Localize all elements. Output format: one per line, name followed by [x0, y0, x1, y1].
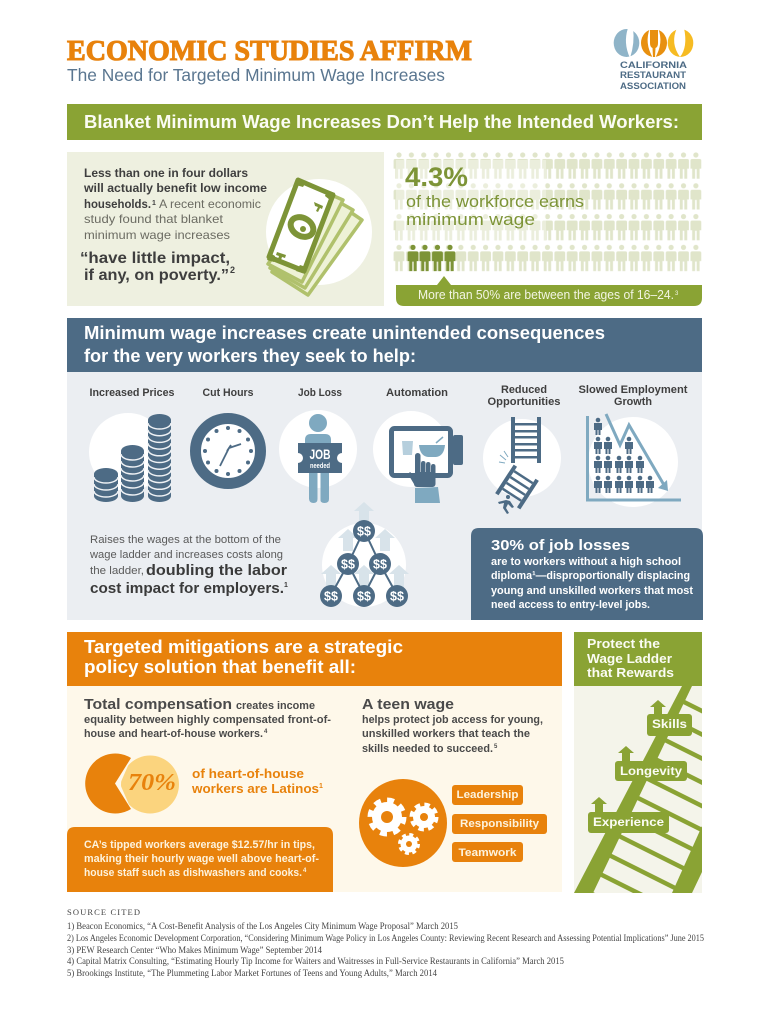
text block: total compensation: house and heart-of-house workers. [84, 728, 263, 740]
panel heading: that Rewards [587, 666, 674, 680]
label: skills: Skills [652, 717, 687, 731]
text block: less than one in four [83, 166, 267, 242]
icon: falling ladder [483, 417, 561, 514]
stat description: of the workforce earns [406, 192, 584, 211]
label: longevity [615, 746, 687, 781]
logo: California Restaurant Association: ASSOCIATION [620, 81, 686, 92]
text block: less than one in four: 1 [152, 200, 156, 207]
stat description: minimum wage [406, 210, 535, 229]
callout: 30% of job losses: young and unskilled workers that most [491, 585, 693, 597]
label: leadership [452, 785, 523, 805]
label: teamwork: Teamwork [458, 847, 517, 859]
stat: 4.3%: 4.3% [405, 162, 468, 192]
quote: if any, on poverty.” [84, 267, 229, 284]
sources: 1) Beacon Economics, “A Cost-Benefit Analysis of the Los Angeles City Minimum Wage Proposal” March 2015 [67, 921, 458, 931]
consequence labels: Slowed Employment [578, 384, 688, 396]
icon: slowed employment chart [588, 414, 681, 507]
text block: teen wage: A teen wage [362, 696, 454, 713]
consequence labels [90, 384, 688, 408]
panel heading [574, 632, 702, 686]
text block: doubling the labor cost: Raises the wages at the bottom of the [90, 534, 281, 546]
label: leadership: Leadership [456, 789, 519, 801]
text block: total compensation [84, 696, 331, 740]
text block: teen wage: skills needed to succeed. [362, 743, 493, 755]
consequence labels: Growth [614, 396, 652, 408]
consequence labels: Job Loss [298, 387, 342, 399]
callout: tipped workers: 4 [303, 868, 307, 874]
quote: “have little impact, [80, 250, 230, 267]
heading bar: targeted mitigations: policy solution that benefit all: [84, 657, 356, 677]
label: experience [588, 797, 669, 833]
icon: job needed person: JOB [310, 446, 330, 462]
logo: California Restaurant Association: RESTAURANT [620, 70, 686, 81]
heading bar: unintended consequences [67, 318, 702, 372]
chart: 70% pie [85, 752, 179, 816]
label: longevity: Longevity [620, 764, 682, 778]
callout: 30% of job losses: diploma¹—disproportionally displacing [491, 570, 690, 582]
consequence labels: Increased Prices [90, 387, 174, 399]
text block: total compensation: creates income [236, 700, 315, 712]
text block: less than one in four: households. [84, 197, 151, 211]
icon: clock [196, 418, 260, 484]
callout: tipped workers: CA’s tipped workers average $12.57/hr in tips, [84, 839, 315, 851]
text block: doubling the labor cost: doubling the labor [146, 562, 287, 579]
stat: latinos: 1 [319, 783, 323, 790]
stat: latinos [191, 766, 323, 796]
sources: 4) Capital Matrix Consulting, “Estimating Hourly Tip Income for Waiters and Waitresses in Full-Service Restaurants in California” March 2015 [67, 956, 564, 966]
label: responsibility: Responsibility [460, 818, 540, 830]
callout: ages 16-24: More than 50% are between the ages of 16–24. [418, 288, 674, 302]
stat: latinos: of heart-of-house [192, 766, 304, 781]
label: experience: Experience [593, 815, 664, 829]
consequence labels: Opportunities [488, 396, 560, 408]
text block: doubling the labor cost: wage ladder and increases costs along [89, 549, 283, 561]
text block: less than one in four: study found that blanket [84, 212, 224, 226]
panel: protect the wage ladder [574, 632, 702, 893]
quote: 2 [230, 265, 235, 275]
heading bar: unintended consequences: for the very workers they seek to help: [84, 346, 416, 366]
heading bar: unintended consequences: Minimum wage increases create unintended consequences [84, 323, 605, 343]
panel: low income households [67, 152, 384, 306]
callout: tipped workers: making their hourly wage well above heart-of- [84, 853, 319, 865]
consequence labels: Automation [386, 387, 448, 399]
title: ECONOMIC STUDIES AFFIRM [67, 36, 472, 67]
icon: gears [359, 779, 447, 867]
callout: 30% of job losses: 30% of job losses [491, 537, 630, 554]
text block: less than one in four: A recent economic [159, 197, 261, 211]
consequence labels: Reduced [501, 384, 547, 396]
label: teamwork [452, 842, 523, 862]
panel: consequences [67, 372, 703, 620]
callout: 30% of job losses [471, 528, 703, 620]
panel: workforce pictogram [393, 152, 702, 306]
stat: latinos: workers are Latinos [191, 781, 319, 796]
icon: job needed person [279, 410, 357, 503]
sources [67, 907, 704, 978]
text block: doubling the labor cost [89, 534, 288, 597]
heading bar: blanket minimum wage: Blanket Minimum Wage Increases Don’t Help the Intended Workers: [84, 111, 679, 132]
text block: doubling the labor cost: cost impact for employers. [90, 580, 284, 597]
panel heading: Wage Ladder [587, 652, 672, 666]
callout: 30% of job losses: are to workers without a high school [491, 556, 681, 568]
callout: 30% of job losses: need access to entry-level jobs. [491, 599, 650, 611]
sources: 2) Los Angeles Economic Development Corporation, “Considering Minimum Wage Policy in Los Angeles County: Reviewing Recent Research and Assessing Potential Implications” June 2015 [67, 933, 704, 943]
text block: total compensation: 4 [264, 729, 268, 735]
text block: teen wage: 5 [494, 744, 498, 750]
subtitle: The Need for Targeted Minimum Wage Increases [67, 65, 445, 85]
text block: total compensation: equality between highly compensated front-of- [84, 714, 331, 726]
heading bar: targeted mitigations: Targeted mitigations are a strategic [84, 637, 403, 657]
logo: California Restaurant Association [614, 28, 693, 92]
callout: ages 16-24: 3 [675, 291, 679, 297]
text block: less than one in four: will actually benefit low income [83, 181, 267, 195]
panel heading: Protect the [587, 637, 660, 651]
icon: job needed person: needed [310, 463, 330, 470]
chart: 70% pie: 70% [128, 770, 176, 796]
panel: mitigations [67, 686, 562, 892]
text block: teen wage: helps protect job access for young, [362, 714, 543, 726]
stat description [406, 192, 584, 229]
text block: doubling the labor cost: the ladder, [90, 565, 144, 577]
icon: automation tablet [373, 411, 463, 503]
icon: wage ladder money tree [320, 502, 409, 607]
sources: 3) PEW Research Center “Who Makes Minimum Wage” September 2014 [67, 945, 322, 955]
callout: tipped workers: house staff such as dishwashers and cooks. [84, 867, 302, 879]
label: skills [647, 700, 692, 736]
callout: tipped workers [67, 827, 333, 892]
text block: teen wage: unskilled workers that teach the [362, 728, 530, 740]
text block: total compensation: Total compensation [84, 696, 232, 713]
people grid [393, 152, 702, 274]
heading bar: targeted mitigations [67, 632, 562, 686]
label: responsibility [452, 814, 547, 834]
text block: doubling the labor cost: 1 [284, 582, 288, 589]
ladder illustration [574, 686, 702, 893]
callout: ages 16-24 [396, 276, 702, 306]
icon: money [266, 178, 372, 295]
sources: 5) Brookings Institute, “The Plummeting Labor Market Fortunes of Teens and Young Adults,” March 2014 [67, 968, 437, 978]
text block: less than one in four: minimum wage increases [84, 228, 230, 242]
consequence labels: Cut Hours [202, 387, 254, 399]
text block: less than one in four: Less than one in four dollars [84, 166, 248, 180]
text block: teen wage [362, 696, 543, 755]
icon: coins [89, 413, 171, 502]
sources: SOURCE CITED [67, 907, 141, 917]
logo: California Restaurant Association: CALIFORNIA [620, 60, 687, 71]
highlighted workers [408, 245, 455, 271]
quote [80, 250, 235, 284]
heading bar: blanket minimum wage [67, 104, 702, 140]
